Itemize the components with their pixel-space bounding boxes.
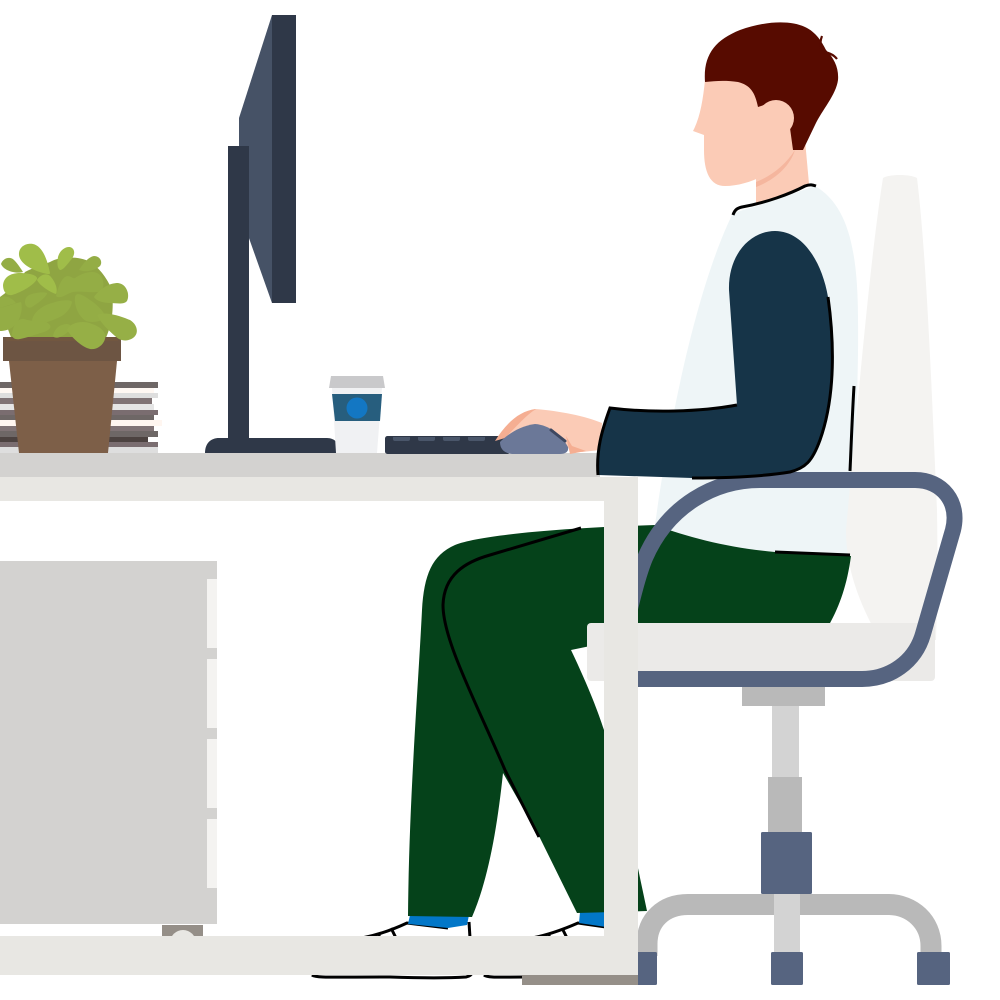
book 12 xyxy=(0,442,158,447)
right sock xyxy=(579,910,606,927)
desk foot bar xyxy=(0,936,638,975)
drawer cabinet xyxy=(0,561,217,924)
hair wisps xyxy=(820,36,837,59)
cup band xyxy=(332,394,382,421)
trouser fold lines xyxy=(443,386,854,837)
keyboard xyxy=(385,436,510,454)
ear xyxy=(758,100,794,136)
cabinet body xyxy=(0,561,217,924)
chair foot right xyxy=(917,952,950,985)
monitor base xyxy=(205,438,341,453)
left shoe outline xyxy=(312,922,472,978)
chair foot centre xyxy=(771,952,803,985)
lower palm shadow xyxy=(566,436,586,454)
jaw shadow xyxy=(756,150,795,187)
chair back xyxy=(846,175,937,640)
coffee cup xyxy=(329,376,385,453)
monitor xyxy=(205,15,341,453)
book 8 xyxy=(0,420,162,426)
pot rim xyxy=(3,337,121,361)
monitor back xyxy=(272,15,296,303)
mouse xyxy=(500,424,568,454)
cup lid xyxy=(329,376,385,388)
pot body xyxy=(9,361,117,453)
chair seat xyxy=(587,623,935,681)
left sock xyxy=(408,915,469,928)
leaves xyxy=(0,244,137,349)
foliage mass xyxy=(0,258,113,340)
potted plant xyxy=(0,244,137,453)
desk top xyxy=(0,453,600,477)
chair wheel arms xyxy=(647,904,931,956)
chair frame xyxy=(626,480,955,679)
drawer handle 2 xyxy=(207,659,217,728)
arm: navy sleeve xyxy=(598,231,833,478)
back leaves xyxy=(0,256,105,339)
mouse button detail xyxy=(551,430,565,441)
book 11 xyxy=(0,437,148,442)
hand skin xyxy=(497,409,602,452)
chair base xyxy=(630,685,950,985)
head xyxy=(693,22,838,215)
drawer handle 1 xyxy=(207,579,217,648)
socks xyxy=(408,910,606,928)
keyboard keys xyxy=(393,437,485,441)
pot rim highlight xyxy=(6,337,118,341)
knee and leg line xyxy=(443,528,581,837)
cup logo xyxy=(346,398,368,418)
drawer handle 3 xyxy=(207,739,217,808)
chair post lower xyxy=(768,777,802,833)
book 2 xyxy=(0,388,154,393)
book 13 xyxy=(0,447,158,453)
hair xyxy=(705,22,838,150)
cup body xyxy=(332,388,382,453)
caster xyxy=(162,925,203,939)
collar xyxy=(733,185,816,215)
book 9 xyxy=(0,426,154,431)
chair foot left xyxy=(630,952,657,985)
stack of books xyxy=(0,382,162,453)
desk xyxy=(0,453,638,985)
trousers xyxy=(408,525,851,917)
neck xyxy=(756,140,809,205)
desk front band xyxy=(0,477,638,501)
chair post upper xyxy=(772,706,799,778)
monitor side xyxy=(239,15,272,303)
back line xyxy=(850,386,854,471)
book 3 xyxy=(0,393,158,398)
face xyxy=(693,78,795,186)
torso: white shirt xyxy=(655,186,858,556)
chair centre leg xyxy=(774,894,800,954)
book 1 xyxy=(0,382,158,388)
desk leg xyxy=(604,501,638,975)
chair seat plate xyxy=(742,685,825,706)
desk floor shadow xyxy=(522,975,638,985)
drawer handle 4 xyxy=(207,819,217,888)
shoes xyxy=(312,922,606,978)
mouse body xyxy=(500,424,568,454)
arm outline xyxy=(598,297,832,478)
front leaves xyxy=(67,283,137,349)
hand shadow fold xyxy=(495,409,536,441)
book 5 xyxy=(0,404,154,410)
hand xyxy=(495,409,602,454)
waist line xyxy=(775,552,850,555)
book 10 xyxy=(0,431,158,437)
right shoe outline xyxy=(484,923,606,977)
monitor stand xyxy=(228,146,249,440)
book 4 xyxy=(0,398,152,404)
keyboard body xyxy=(385,436,510,454)
bright leaves xyxy=(3,244,74,295)
caster wheel xyxy=(170,930,196,956)
book 7 xyxy=(0,415,154,420)
book 6 xyxy=(0,410,158,415)
chair hub xyxy=(761,832,812,894)
